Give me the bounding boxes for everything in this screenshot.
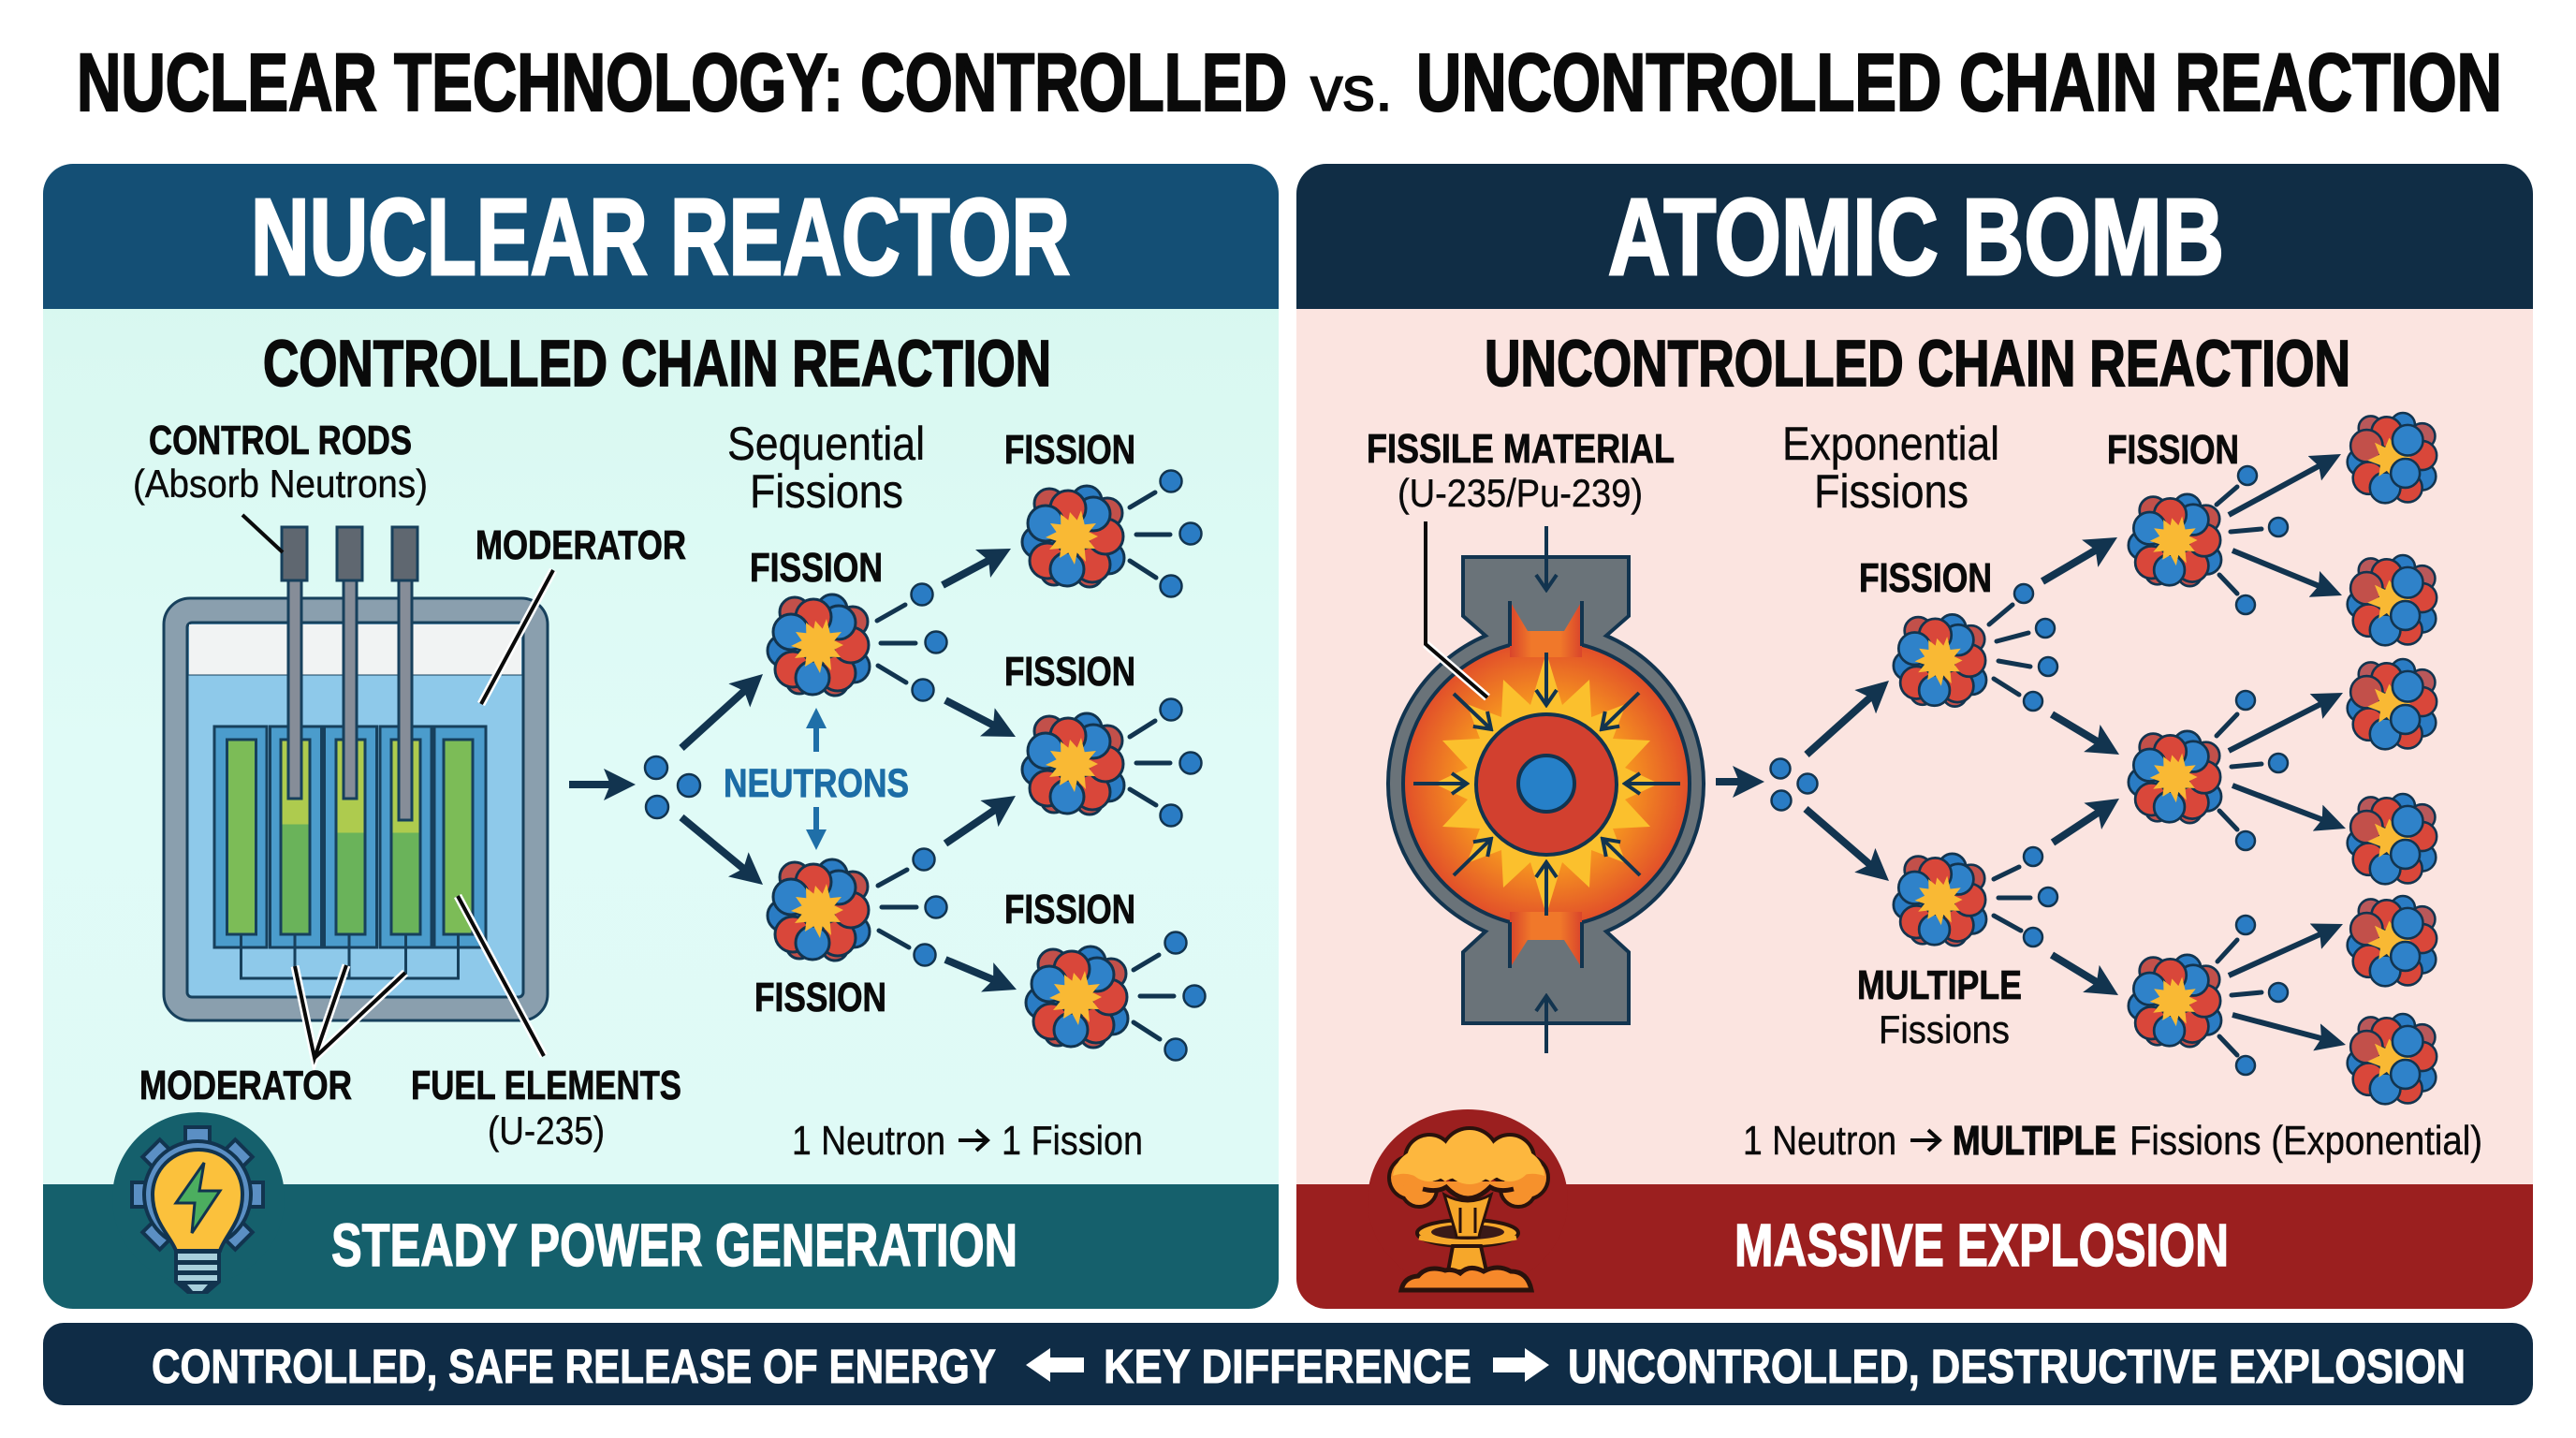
caption: one neutron one fission: 1 Neutron — [792, 1118, 945, 1164]
label: neutrons with arrows — [724, 708, 909, 850]
panel body: reactor — [43, 281, 1279, 1217]
label: multiple fissions: MULTIPLE — [1857, 962, 2022, 1008]
arrows: second generation — [2042, 537, 2119, 995]
band: massive explosion — [1296, 1184, 2533, 1309]
arrows: first generation — [681, 674, 763, 885]
moderator water — [187, 623, 523, 997]
label: moderator bottom: MODERATOR — [139, 1063, 352, 1108]
label: control rods: CONTROL RODS — [149, 418, 412, 463]
atom: fission right bottom — [1026, 932, 1206, 1060]
label: sequential fissions: Sequential — [727, 418, 925, 470]
control rods — [282, 527, 417, 820]
label: fissile material: FISSILE MATERIAL — [1367, 426, 1675, 472]
label: fission B1: FISSION — [1004, 427, 1135, 473]
arrows: third generation — [2229, 454, 2346, 1045]
label: fission B3: FISSION — [1004, 887, 1135, 932]
band: steady power generation: STEADY POWER GENERATION — [331, 1211, 1017, 1279]
label: fission first generation: FISSION — [1859, 555, 1992, 601]
explosive necks — [1510, 601, 1582, 968]
panel: atomic bomb — [1296, 164, 2533, 1309]
panel: nuclear reactor — [43, 164, 1279, 1309]
atom: lower first generation — [1894, 847, 2057, 946]
leader line: fissile material — [1426, 521, 1487, 697]
leader lines — [242, 515, 553, 1058]
label: exponential fissions: Exponential — [1782, 418, 1999, 470]
bar: key difference — [43, 1323, 2533, 1405]
arrows: first generation — [1806, 681, 1889, 881]
label: fission A1: FISSION — [750, 545, 883, 591]
label: multiple fissions: Fissions — [1879, 1007, 2010, 1051]
bomb casing — [1388, 557, 1704, 1023]
arrow: from reactor — [569, 781, 636, 788]
atom: second generation middle — [2129, 691, 2288, 850]
coolant pipes — [242, 934, 459, 978]
fissile core — [1476, 714, 1617, 855]
caption: one neutron multiple fissions: MULTIPLE — [1953, 1118, 2116, 1164]
shockwave star — [1434, 653, 1659, 915]
atom: fission right top — [1022, 470, 1202, 597]
icon: light bulb with gear — [112, 1112, 285, 1294]
label: neutrons with arrows: NEUTRONS — [724, 761, 909, 806]
arrows: second generation — [943, 549, 1017, 990]
atom: fission upper — [768, 584, 947, 700]
label: fission B2: FISSION — [1004, 649, 1135, 695]
label: sequential fissions — [727, 418, 925, 518]
fuel elements — [227, 740, 473, 934]
label: fissile material — [1367, 426, 1675, 515]
icon: mushroom cloud — [1368, 1109, 1568, 1291]
atom: second generation top — [2129, 466, 2288, 614]
label: control rods: (Absorb Neutrons) — [133, 462, 428, 506]
label: moderator top: MODERATOR — [476, 522, 686, 568]
inner blue sphere — [1518, 756, 1574, 812]
label: fuel elements — [411, 1063, 681, 1152]
reactor vessel — [164, 598, 548, 1020]
caption: one neutron one fission — [792, 1118, 1143, 1164]
chain reaction diagram: controlled — [569, 470, 1206, 1060]
label: fuel elements: (U-235) — [488, 1108, 605, 1152]
atom: fission right middle — [1022, 698, 1202, 826]
title: NUCLEAR TECHNOLOGY: CONTROLLED — [77, 37, 1287, 128]
atom: second generation bottom — [2129, 916, 2288, 1075]
initial neutrons — [645, 756, 700, 818]
arrow: from bomb — [1716, 778, 1764, 785]
label: control rods — [133, 418, 428, 506]
bomb diagram — [1388, 521, 1704, 1053]
atom: upper first generation — [1894, 584, 2057, 711]
explosive lens — [1403, 640, 1690, 927]
reactor diagram — [164, 515, 553, 1058]
caption: one neutron one fission: 1 Fission — [1002, 1118, 1143, 1164]
caption: one neutron multiple fissions — [1743, 1118, 2482, 1164]
initial neutrons — [1771, 758, 1818, 811]
text: key difference: KEY DIFFERENCE — [1104, 1340, 1471, 1393]
title: vs. — [1310, 53, 1393, 125]
label: fission A2: FISSION — [754, 975, 886, 1020]
subheading: controlled chain reaction: CONTROLLED CHAIN REACTION — [263, 327, 1051, 400]
label: fissile material: (U-235/Pu-239) — [1398, 471, 1643, 515]
panel body: bomb — [1296, 281, 2533, 1217]
core compartments — [214, 726, 486, 947]
title — [77, 37, 2502, 128]
label: exponential fissions: Fissions — [1814, 465, 1969, 518]
label: fuel elements: FUEL ELEMENTS — [411, 1063, 681, 1108]
implosion arrows — [1413, 526, 1680, 1053]
header: atomic bomb — [1296, 164, 2533, 309]
chain reaction diagram: uncontrolled — [1716, 413, 2437, 1104]
band: massive explosion: MASSIVE EXPLOSION — [1734, 1211, 2229, 1279]
atom: fission lower — [768, 848, 947, 966]
header: nuclear reactor — [43, 164, 1279, 309]
band: steady power generation — [43, 1184, 1279, 1309]
label: multiple fissions — [1857, 962, 2022, 1051]
header: nuclear reactor: NUCLEAR REACTOR — [251, 176, 1070, 298]
atoms: third generation — [2348, 413, 2437, 1104]
text: controlled safe release: CONTROLLED, SAFE RELEASE OF ENERGY — [152, 1340, 996, 1393]
label: fission top: FISSION — [2107, 427, 2239, 473]
label: sequential fissions: Fissions — [750, 465, 903, 518]
header: atomic bomb: ATOMIC BOMB — [1608, 176, 2224, 298]
arrow: left — [1026, 1348, 1084, 1382]
caption: one neutron multiple fissions: 1 Neutron — [1743, 1118, 1896, 1164]
label: exponential fissions — [1782, 418, 1999, 518]
caption: one neutron multiple fissions: Fissions (Exponential) — [2130, 1118, 2482, 1164]
arrow: right — [1493, 1348, 1549, 1382]
